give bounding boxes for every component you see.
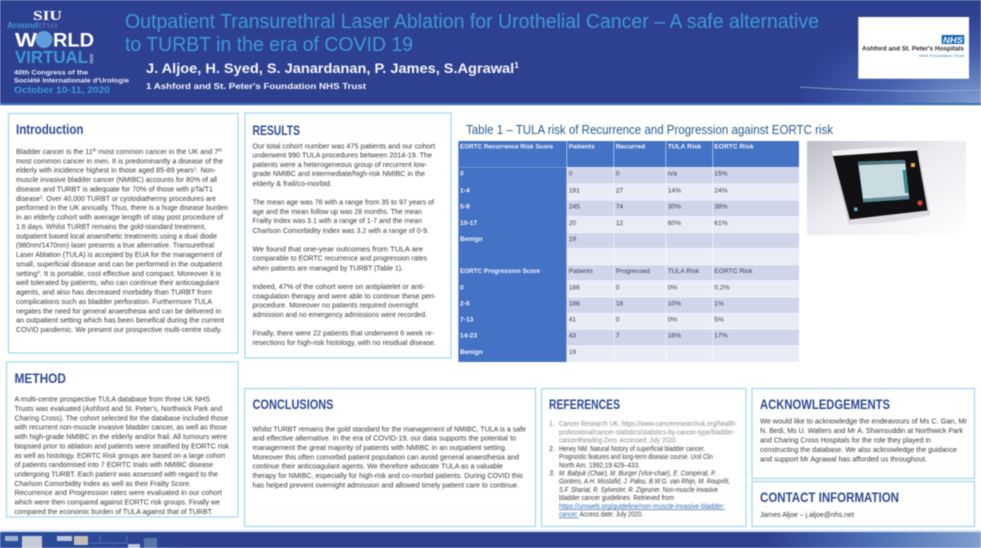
text: results body: elderly & frail/co-morbid.	[252, 179, 332, 188]
table: recurrence rows: 19	[569, 236, 576, 243]
table: progression rows: 1%	[714, 300, 724, 307]
text: references list: cancer#heading-Zero. Accessed: July 2020.	[559, 436, 677, 445]
table: recurrence rows: 191	[569, 187, 580, 194]
text: references list: https://uroweb.org/guideline/non-muscle-invasive-bladder-	[559, 501, 726, 510]
text: method body	[13, 395, 229, 516]
text: method body: Recurrence and Progression rates were evaluated in our cohort	[14, 488, 222, 497]
text: introduction body	[15, 147, 228, 334]
text: introduction body: . It is portable, cost effective and compact. Moreover it is	[40, 269, 221, 278]
text: results body	[252, 141, 437, 347]
text: introduction body: (980nm/1470nm) laser presents a true alternative. Transurethral	[16, 241, 214, 250]
table: progression rows: 2-6	[460, 300, 470, 307]
table: recurrence rows: 0	[616, 171, 620, 178]
text: results body: Finally, there were 22 patients that underwent 6 week re-	[252, 329, 435, 338]
text: introduction body: disease and TURBT is adequate for 70% of those with pTa/T1	[16, 184, 213, 194]
table title: Table 1 – TULA risk of Recurrence and Progression against EORTC risk	[466, 123, 834, 137]
table: recurrence rows: 38%	[714, 204, 728, 210]
text: conclusions body: management the great majority of patients with NMIBC in an outpatient setting.	[252, 443, 507, 452]
text: conclusions body: therapy for NMIBC, especially for high-risk and co-morbid patients. During COVID this	[252, 471, 523, 480]
text: results body: resections for high-risk histology, with no residual disease.	[252, 338, 436, 347]
table: progression rows: 14-23	[460, 332, 477, 340]
table: recurrence rows: 30%	[668, 204, 681, 210]
table: recurrence rows: Patients	[569, 144, 595, 150]
text: results body: The mean age was 76 with a range from 35 to 97 years of	[252, 198, 434, 207]
text: method body: Charlson Comorbidity Index as well as their Frailty Score.	[14, 479, 191, 488]
table: progression rows: 0.2%	[714, 284, 730, 292]
table: progression rows: Benign	[460, 349, 483, 356]
text: references list: professional/cancer-statistics/statistics-by-cancer-type/bladder-	[559, 427, 736, 436]
text: introduction body: . Over 40,000 TURBT or cystodiathermy procedures are	[43, 194, 216, 203]
table: recurrence rows: 61%	[714, 220, 728, 227]
text: conclusions body: Whilst TURBT remains the gold standard for the management of NMIBC, TULA is a safe	[252, 424, 526, 433]
text: method body: as well as histology. EORTC Risk groups are based on a large cohort	[14, 451, 225, 460]
text: introduction body: th	[93, 148, 97, 152]
text: introduction body: 1	[194, 166, 197, 171]
table: progression rows: 0	[616, 284, 620, 292]
text: references list: North Am. 1992;19:429–433.	[559, 460, 640, 469]
heading: conclusions: CONCLUSIONS	[252, 397, 334, 412]
table: progression rows: 0%	[668, 284, 677, 292]
table: progression rows: TULA Risk	[668, 268, 700, 275]
authors: 1	[514, 61, 520, 70]
NHS logo: Ashford and St. Peter's Hospitals	[862, 46, 965, 52]
table: background cells	[458, 141, 799, 362]
table: recurrence rows: 5-9	[460, 204, 470, 210]
text: results body: We found that one-year outcomes from TULA are	[252, 244, 423, 253]
conference logo: 2020	[89, 53, 94, 64]
table: recurrence rows: 15%	[714, 171, 728, 178]
table: progression rows: 18	[616, 300, 623, 307]
text: results body: coagulation therapy and were able to continue these peri-	[252, 291, 437, 300]
table: EORTC risk	[458, 141, 799, 362]
conference logo: VIRTUAL	[15, 47, 88, 67]
table: recurrence rows: 12	[616, 220, 623, 227]
text: conclusions body: continue their anticoagulant agents. We therefore advocate TULA as a valuable	[252, 462, 503, 471]
text: introduction body: in an elderly cohort with average length of stay post procedure of	[16, 213, 223, 222]
text: acknowledgements body: and Charing Cross Hospitals for the role they played in	[760, 436, 931, 445]
text: method body: biopsied prior to ablation and patients were stratified by EORTC risk	[14, 441, 229, 450]
text: results body: grade NMIBC and intermediate/high-risk NMIBC in the	[252, 169, 425, 178]
table: recurrence rows: 60%	[668, 220, 681, 227]
panel: method	[6, 362, 238, 517]
table: recurrence rows: Recurred	[616, 144, 645, 150]
table: recurrence rows: 24%	[714, 187, 728, 194]
text: introduction body: negates the need for general anaesthesia and can be delivered in	[16, 306, 221, 315]
text: method body: Charing Cross). The cohort selected for the database included those	[14, 413, 228, 422]
table: progression rows: 186	[569, 300, 580, 307]
table: progression rows	[460, 268, 753, 356]
text: references list: Gontero, A.H. Mostafid, J. Palou, B.W.G. van Rhijn, M. Rouprêt,	[559, 477, 730, 486]
text: conclusions body: and effective alternative. In the era of COVID-19, our data supports the potential to	[252, 434, 516, 443]
table: progression rows: 41	[569, 316, 576, 324]
text: introduction body: Laser Ablation (TULA) is accepted by EUA for the management of	[16, 250, 222, 259]
conference logo: RLD	[53, 30, 94, 52]
text: references list: bladder cancer guidelines. Retrieved from	[559, 493, 674, 502]
text: method body: with high-grade NMIBC in the elderly and/or frail. All tumours were	[13, 432, 227, 441]
table: progression rows: 7	[616, 332, 620, 340]
table: progression rows: EORTC Risk	[714, 268, 753, 275]
text: introduction body: muscle invasive bladder cancer (NMIBC) accounts for 80% of all	[16, 175, 217, 184]
text: method body: undergoing TURBT. Each patient was assessed with regard to the	[14, 470, 218, 478]
text: references list: 3.	[549, 468, 555, 477]
table: progression rows: Patients	[569, 268, 594, 275]
table: progression rows: 0	[616, 316, 620, 324]
table: recurrence rows: TULA Risk	[668, 144, 702, 150]
text: results body: comparable to EORTC recurrence and progression rates	[252, 254, 427, 263]
text: introduction body: performed in the UK annually. Thus, there is a huge disease burden	[16, 203, 228, 212]
text: method body: Trusts was evaluated (Ashford and St. Peter's, Northwick Park and	[14, 404, 222, 413]
text: introduction body: complications such as bladder perforation. Furthermore TULA	[16, 297, 212, 306]
panel: references	[542, 388, 746, 526]
heading: method: METHOD	[14, 371, 66, 386]
table: progression rows: 0%	[668, 316, 677, 324]
text: references list: 1.	[549, 419, 555, 428]
text: method body: which were then compared against EORTC risk groups. Finally we	[14, 498, 220, 507]
text: introduction body: agents, and also has decreased morbidity than TURBT from	[16, 288, 212, 296]
conference logo: October 10-11, 2020	[14, 85, 110, 95]
text: acknowledgements body: N. Bedi, Ms U. Walters and Mr A. Shamsuddin at Northwick Park	[760, 426, 963, 435]
text: results body: admission and no emergency admissions were recorded.	[252, 310, 427, 319]
text: method body: with recurrent non-muscle invasive bladder cancer, as well as those	[14, 423, 227, 432]
text: introduction body: . Non-	[196, 166, 217, 175]
image: laser device	[807, 141, 966, 235]
text: conclusions body: Moreover this often comorbid patient population can avoid general anaesthesia and	[252, 452, 519, 461]
table: recurrence rows: 0	[460, 171, 464, 178]
text: acknowledgements body: and support Mr Agrawal has afforded us throughout.	[760, 455, 927, 464]
text: introduction body: elderly with incidence highest in those aged 85-89 years	[16, 166, 195, 175]
table: progression rows: 16%	[668, 332, 681, 340]
table: recurrence rows: n/a	[668, 171, 677, 178]
NHS logo	[858, 17, 969, 79]
text: introduction body: setting	[16, 269, 37, 278]
text: acknowledgements body: constructing the database. We also acknowledge the guidance	[760, 445, 957, 454]
text: references list: M. Babjuk (Chair), M. Burger (Vice-chair), E. Compérat, P.	[559, 468, 716, 477]
table: progression rows: 10%	[668, 300, 681, 307]
text: introduction body: 2	[40, 194, 43, 199]
text: introduction body: an outpatient setting which has been benefical during the current	[16, 316, 224, 325]
table: recurrence rows: Benign	[460, 236, 483, 243]
table: recurrence rows: 245	[569, 204, 580, 210]
conference logo: Around	[7, 20, 38, 30]
text: introduction body: outpatient based local anaesthetic treatments using a dual diode	[16, 231, 217, 240]
conference logo: W	[15, 30, 37, 52]
table: progression rows: 17%	[714, 332, 728, 340]
table: progression rows: EORTC Progression Score	[460, 268, 540, 275]
NHS logo: NHS Foundation Trust	[919, 53, 965, 58]
table: recurrence rows: 74	[616, 204, 623, 210]
text: references list: Cancer Research UK, https://www.cancerresearchuk.org/health-	[559, 419, 738, 428]
table: recurrence rows: EORTC Risk	[714, 144, 754, 150]
heading: introduction: Introduction	[16, 122, 84, 137]
text: results body: when patients are managed by TURBT (Table 1).	[252, 263, 403, 272]
affiliation: 1 Ashford and St. Peter's Foundation NHS Trust	[146, 81, 366, 91]
text: results body: Indeed, 47% of the cohort were on antiplatelet or anti-	[252, 282, 426, 291]
text: results body: procedure. Moreover no patients required overnight	[252, 301, 418, 310]
table: progression rows: 186	[569, 284, 580, 292]
text: method body: of patients randomised into 7 EORTC trials with NMIBC disease	[14, 460, 213, 469]
panel: acknowledgements	[752, 388, 974, 478]
text: method body: compared the economic burden of TULA against that of TURBT.	[14, 507, 213, 516]
conference logo: Société Internationale d'Urologie	[14, 78, 130, 84]
text: references list: S.F. Shariat, R. Sylvester, R. Zigeuner. Non-muscle invasive	[559, 485, 718, 494]
text: references list: 2.	[549, 444, 555, 453]
panel: introduction	[8, 114, 238, 353]
text: references list: cancer. Access date: July 2020.	[559, 510, 643, 519]
text: results body: patients were a heterogeneous group of recurrent low-	[252, 160, 428, 169]
text: introduction body: well tolerated by patients, who can continue their anticoagulant	[15, 278, 219, 287]
heading: acknowledgements: ACKNOWLEDGEMENTS	[760, 397, 890, 412]
table: progression rows: 0	[460, 284, 464, 292]
text: results body: Charlson Comorbidity Index was 3.2 with a range of 0-9.	[252, 226, 429, 235]
table: recurrence rows: EORTC Recurrence Risk Score	[460, 144, 553, 150]
text: introduction body: most common cancer in the UK and 7	[96, 147, 218, 156]
text: references list: Heney NM. Natural history of superficial bladder cancer.	[559, 444, 705, 453]
conference logo: the	[38, 20, 58, 30]
table: progression rows: 7-13	[460, 316, 474, 324]
text: results body: Our total cohort number was 475 patients and our cohort	[252, 141, 435, 150]
text: introduction body: 1.6 days. Whilst TURBT remains the gold-standard treatment,	[16, 222, 206, 231]
text: introduction body: disease	[16, 194, 41, 203]
text: conclusions body	[252, 424, 526, 490]
text: results body: Frailty Index was 3.1 with a range of 1-7 and the mean	[252, 216, 422, 225]
table: recurrence rows: 10-17	[460, 220, 477, 227]
conference logo: 40th Congress of the	[14, 70, 89, 76]
text: acknowledgements body: We would like to acknowledge the endeavours of Ms C. Gan, Mr	[760, 417, 968, 426]
table: recurrence rows	[460, 144, 754, 243]
text: references list	[549, 419, 738, 519]
text: introduction body: Bladder cancer is the 11	[16, 147, 93, 156]
text: conclusions body: has helped prevent overnight admission and allowed timely patient care to continue.	[252, 481, 519, 490]
table: recurrence rows: 1-4	[460, 187, 470, 194]
text: introduction body: th	[218, 148, 222, 152]
text: contact details: James Aljoe – j.aljoe@nhs.net	[760, 510, 854, 519]
table: progression rows: 5%	[714, 316, 724, 324]
table: recurrence rows: 14%	[668, 187, 681, 194]
heading: references: REFERENCES	[549, 397, 620, 412]
panel: conclusions	[244, 388, 536, 526]
table: recurrence rows: 27	[616, 187, 623, 194]
title	[125, 11, 819, 56]
text: results body: underwent 990 TULA procedures between 2014-19. The	[252, 151, 432, 160]
panel: contact information	[752, 482, 974, 526]
heading: results: RESULTS	[252, 123, 300, 138]
table: recurrence rows: 0	[569, 171, 573, 178]
table: progression rows: Progressed	[616, 268, 650, 275]
header banner	[0, 0, 981, 105]
title: Outpatient Transurethral Laser Ablation for Urothelial Cancer – A safe alternative	[125, 11, 819, 33]
title: to TURBT in the era of COVID 19	[125, 34, 413, 56]
text: introduction body: small, superficial disease and can be performed in the outpatient	[16, 259, 222, 268]
footer banner	[0, 530, 981, 548]
table: progression rows: 43	[569, 332, 576, 340]
authors: J. Aljoe, H. Syed, S. Janardanan, P. James, S.Agrawal	[146, 61, 487, 76]
text: introduction body: most common cancer in men. It is predominantly a disease of the	[16, 156, 223, 165]
text: introduction body: 3	[37, 269, 40, 274]
text: introduction body: COVID pandemic. We present our prospective multi-centre study.	[16, 325, 222, 334]
text: method body: A multi-centre prospective TULA database from three UK NHS	[14, 395, 210, 404]
text: results body: age and the mean follow up was 28 months. The mean	[252, 207, 422, 216]
panel: results	[245, 113, 451, 358]
conference logo	[7, 9, 130, 95]
heading: contact information: CONTACT INFORMATION	[760, 490, 899, 505]
table: recurrence rows: 20	[569, 220, 576, 227]
NHS logo: NHS	[943, 35, 963, 45]
text: references list: Prognostic features and long-term disease course. Urol Clin	[559, 452, 713, 461]
text: acknowledgements body	[760, 417, 968, 464]
table: progression rows: 19	[569, 349, 576, 356]
conference logo: SIU	[33, 9, 62, 24]
